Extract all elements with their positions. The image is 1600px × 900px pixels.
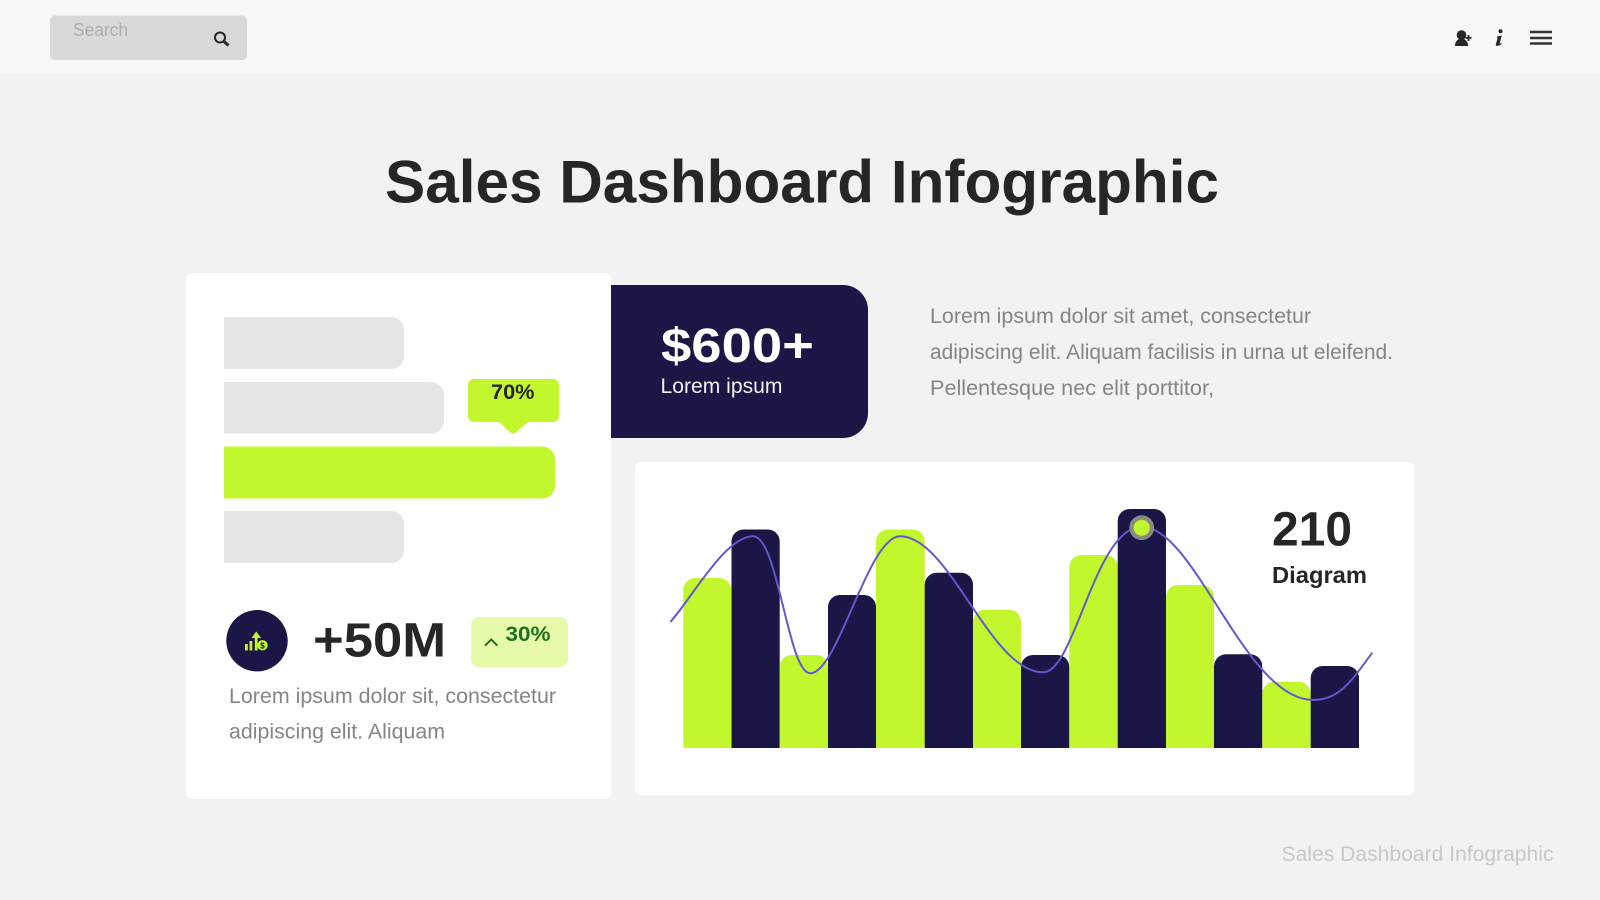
- icon: menu: [1530, 32, 1552, 44]
- search placeholder: Search: [73, 20, 128, 40]
- badge 30% increase: [471, 617, 568, 667]
- stat +50M: +50M: [313, 614, 446, 668]
- paragraph text: adipiscing elit. Aliquam facilisis in urna ut eleifend.: [930, 340, 1393, 364]
- trend line: [670, 527, 1372, 700]
- title: Sales Dashboard Infographic: [385, 148, 1219, 216]
- stat $600+: $600+: [661, 320, 814, 373]
- progress bar 1: [224, 317, 404, 369]
- top navigation bar: [0, 0, 1600, 73]
- stat label: Diagram: [1272, 562, 1367, 588]
- highlighted data point: [1129, 515, 1154, 540]
- icon: magnifier: [215, 32, 228, 46]
- description text: [229, 684, 556, 744]
- stat caption: Lorem ipsum: [660, 375, 782, 398]
- stat 210: 210: [1272, 504, 1352, 556]
- footer text: Sales Dashboard Infographic: [1282, 842, 1554, 866]
- progress bar 3 highlighted: [224, 446, 555, 498]
- icon: add user: [1455, 30, 1472, 46]
- tooltip 70%: [468, 379, 559, 434]
- tooltip 70%: 70%: [491, 381, 535, 404]
- description text: Lorem ipsum dolor sit, consectetur: [229, 684, 556, 708]
- icon: info: [1496, 29, 1502, 46]
- icon: sales growth circle: [226, 610, 288, 671]
- paragraph text: Lorem ipsum dolor sit amet, consectetur: [930, 304, 1311, 328]
- panel: diagram chart: [635, 462, 1414, 795]
- paragraph text: Pellentesque nec elit porttitor,: [930, 376, 1214, 400]
- badge 30% increase: 30%: [506, 622, 550, 646]
- progress bar 4: [224, 511, 404, 563]
- panel: progress bars and 50M stat: [186, 273, 612, 799]
- progress bar 2: [224, 382, 444, 434]
- icon: sales growth circle: $: [260, 641, 265, 650]
- panel: $600+ stat: [611, 285, 868, 438]
- bar chart: [683, 509, 1359, 748]
- search box: [50, 16, 247, 60]
- description text: adipiscing elit. Aliquam: [229, 720, 445, 744]
- paragraph text: [930, 304, 1393, 400]
